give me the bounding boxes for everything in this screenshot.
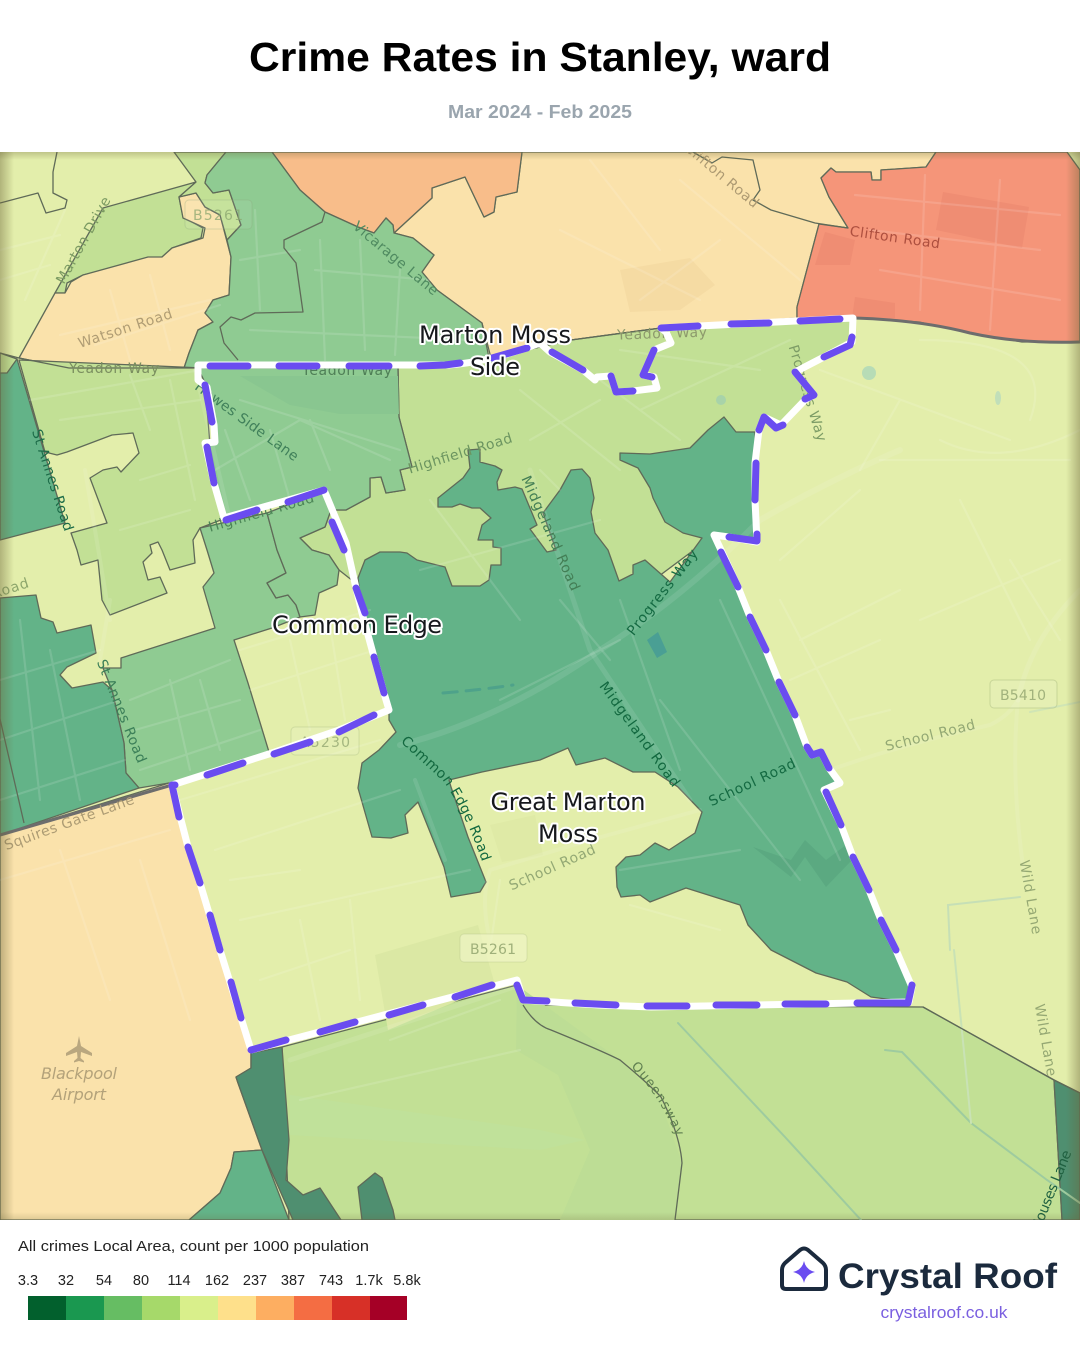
legend scale values [18, 1273, 421, 1289]
road label: Yeadon Way west: Yeadon Way [68, 361, 159, 377]
legend scale values: 237 [243, 1273, 267, 1289]
road label: St Annes Road south: St Annes Road [93, 657, 149, 765]
place label: Great Marton Moss: Moss [538, 820, 598, 848]
airport label [41, 1036, 118, 1104]
legend scale values: 114 [167, 1273, 191, 1289]
road label: Wild Lane south: Wild Lane [1031, 1003, 1059, 1078]
legend colour bar [28, 1296, 407, 1320]
road label: School Road south: School Road [507, 842, 598, 894]
road sign: B5261 north: B5261 [193, 208, 243, 224]
main roads [85, 370, 1080, 1060]
road sign: B5410 [990, 680, 1057, 708]
road label: Yeadon Way east: Yeadon Way [616, 324, 707, 344]
legend scale values: 5.8k [393, 1273, 421, 1289]
road label: Common Edge Road: Common Edge Road [402, 736, 492, 861]
website url: crystalroof.co.uk [880, 1304, 1008, 1322]
road label: Highfield Road west: Highfield Road [207, 490, 316, 536]
map base area: lightest green band [0, 152, 1080, 1220]
legend scale values: 743 [319, 1273, 343, 1289]
road sign: B5410: B5410 [1000, 688, 1046, 704]
road sign: B5261 south: B5261 [470, 942, 516, 958]
road label: Marton Drive: Marton Drive [53, 194, 114, 287]
road sign: A5230 [291, 727, 359, 755]
place label: Marton Moss Side: Side [470, 353, 520, 381]
map areas: crime rate zones [0, 152, 1080, 1220]
road label: Watson Road: Watson Road [76, 306, 174, 352]
legend scale values: 80 [133, 1273, 149, 1289]
road label: Clifton Road east: Clifton Road [849, 224, 941, 252]
road sign: B5261 south [460, 934, 527, 962]
legend [18, 1239, 421, 1320]
road label: Progress Way centre: Progress Way [624, 546, 701, 639]
busy road line: Squires Gate Lane [0, 785, 172, 835]
subtitle: date range: Mar 2024 - Feb 2025 [448, 101, 632, 122]
legend scale values: 32 [58, 1273, 74, 1289]
legend scale values: 387 [281, 1273, 305, 1289]
legend scale values: 1.7k [355, 1273, 383, 1289]
wordmark: Crystal Roof [838, 1257, 1057, 1296]
road label: Progress Way north: Progress Way [785, 343, 829, 443]
legend title: All crimes Local Area, count per 1000 population [18, 1239, 369, 1255]
road label: Hawes Side Lane: Hawes Side Lane [192, 379, 301, 465]
road label: Wild Lane north: Wild Lane [1016, 859, 1044, 936]
text: Blackpool Airport: Blackpool [41, 1064, 118, 1083]
road label: Midgeland Road south: Midgeland Road [596, 679, 683, 790]
road sign: B5261 north [185, 200, 252, 229]
road label: Squires Gate Lane: Squires Gate Lane [2, 792, 136, 854]
street network [0, 160, 1080, 1100]
road label: Queensway: Queensway [633, 1062, 683, 1134]
icon: house with star [782, 1248, 826, 1289]
road label: Vicarage Lane: Vicarage Lane [350, 219, 441, 299]
legend scale values: 54 [96, 1273, 112, 1289]
road label: Highfield Road east: Highfield Road [406, 431, 514, 477]
title: Crime Rates in Stanley, ward [249, 34, 831, 80]
place label: Common Edge: Common Edge [272, 611, 442, 639]
road sign: A5230: A5230 [300, 735, 350, 751]
legend scale values: 162 [205, 1273, 229, 1289]
boundary lines: thin grey ward and lane edges [0, 152, 1080, 1220]
road label: Midgeland Road north: Midgeland Road [518, 474, 583, 593]
map edge vignette [0, 152, 1080, 1220]
legend scale values: 3.3 [18, 1273, 38, 1289]
place label: Marton Moss Side: Marton Moss [419, 321, 571, 349]
road label: Clifton Road north: Clifton Road [681, 140, 762, 211]
road label: School Road east: School Road [884, 717, 977, 755]
shaded land-use patches [386, 194, 1028, 1220]
busy road line: Clifton side [855, 318, 1080, 342]
logo: Crystal Roof [782, 1248, 1057, 1322]
road label: School Road centre: School Road [706, 756, 798, 810]
road label: Yeadon Way centre: Yeadon Way [301, 363, 392, 379]
main low-crime zone in the ward [358, 417, 912, 1002]
road label: St Annes Road north: St Annes Road [28, 427, 76, 533]
place label: Great Marton Moss: Great Marton [490, 788, 646, 816]
icon: airplane [66, 1036, 92, 1062]
road label: Houses Lane: Houses Lane [1029, 1148, 1075, 1233]
ward boundary: white and purple dashed outline [172, 318, 912, 1050]
rivers and water [443, 366, 1080, 1220]
text: Blackpool Airport: Airport [51, 1085, 107, 1104]
